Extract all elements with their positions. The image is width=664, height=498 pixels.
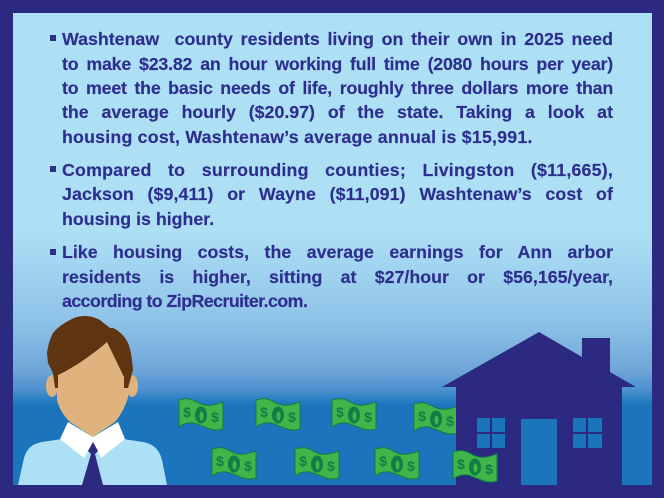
money bill: $	[364, 409, 372, 425]
right window	[573, 418, 602, 448]
door	[521, 419, 557, 485]
left window	[477, 418, 505, 448]
paragraph line 1: Compared to surrounding counties; Livingston ($11,665),	[62, 160, 613, 180]
money bill: $	[327, 458, 335, 474]
face	[57, 338, 128, 437]
money bill: $	[216, 453, 224, 469]
text block: earnings	[50, 242, 613, 311]
money bill in front of house	[453, 451, 497, 482]
bullet	[50, 249, 56, 255]
paragraph line 2: to make $23.82 an hour working full time (2080 hours per year)	[62, 54, 613, 74]
money bill: $	[288, 409, 296, 425]
hair	[47, 316, 133, 388]
money bill in front of house: $	[457, 456, 465, 472]
shirt	[18, 439, 167, 485]
bullet	[50, 166, 56, 172]
money bill in front of house: $	[485, 461, 493, 477]
bullet	[50, 35, 56, 41]
money bill	[212, 448, 256, 479]
paragraph line 3: to meet the basic needs of life, roughly three dollars more than	[62, 78, 613, 98]
money bill: $	[336, 404, 344, 420]
money bill	[414, 403, 458, 434]
icon: house	[442, 332, 636, 485]
money bill: $	[407, 458, 415, 474]
money bill	[375, 448, 419, 479]
ears	[46, 375, 138, 397]
money bill: $	[418, 408, 426, 424]
paragraph line 4: the average hourly ($20.97) of the state. Taking a look at	[62, 102, 613, 122]
money bill	[179, 399, 223, 430]
money bill: $	[260, 404, 268, 420]
icon: person	[18, 316, 167, 485]
money bill	[256, 399, 300, 430]
money bill	[332, 399, 376, 430]
paragraph line 1: Washtenaw county residents living on their own in 2025 need	[62, 29, 613, 49]
paragraph line 1: Like housing costs, the average earnings for Ann arbor	[62, 242, 613, 262]
paragraph line 5: housing cost, Washtenaw’s average annual is $15,991.	[62, 127, 533, 147]
money bill: $	[299, 453, 307, 469]
money bill: $	[379, 453, 387, 469]
paragraph line 3: housing is higher.	[62, 209, 214, 229]
collar	[60, 422, 125, 458]
paragraph line 2: residents is higher, sitting at $27/hour or $56,165/year,	[62, 267, 613, 287]
text block: surrounding counties	[50, 160, 614, 229]
text block: cost of living	[50, 29, 613, 147]
money bill: $	[244, 458, 252, 474]
money bill: $	[446, 413, 454, 429]
paragraph line 3: according to ZipRecruiter.com.	[62, 291, 307, 311]
money bill: $	[211, 409, 219, 425]
money bill: $	[183, 404, 191, 420]
tie	[82, 442, 103, 485]
money bill	[295, 448, 339, 479]
paragraph line 2: Jackson ($9,411) or Wayne ($11,091) Washtenaw’s cost of	[62, 184, 613, 204]
